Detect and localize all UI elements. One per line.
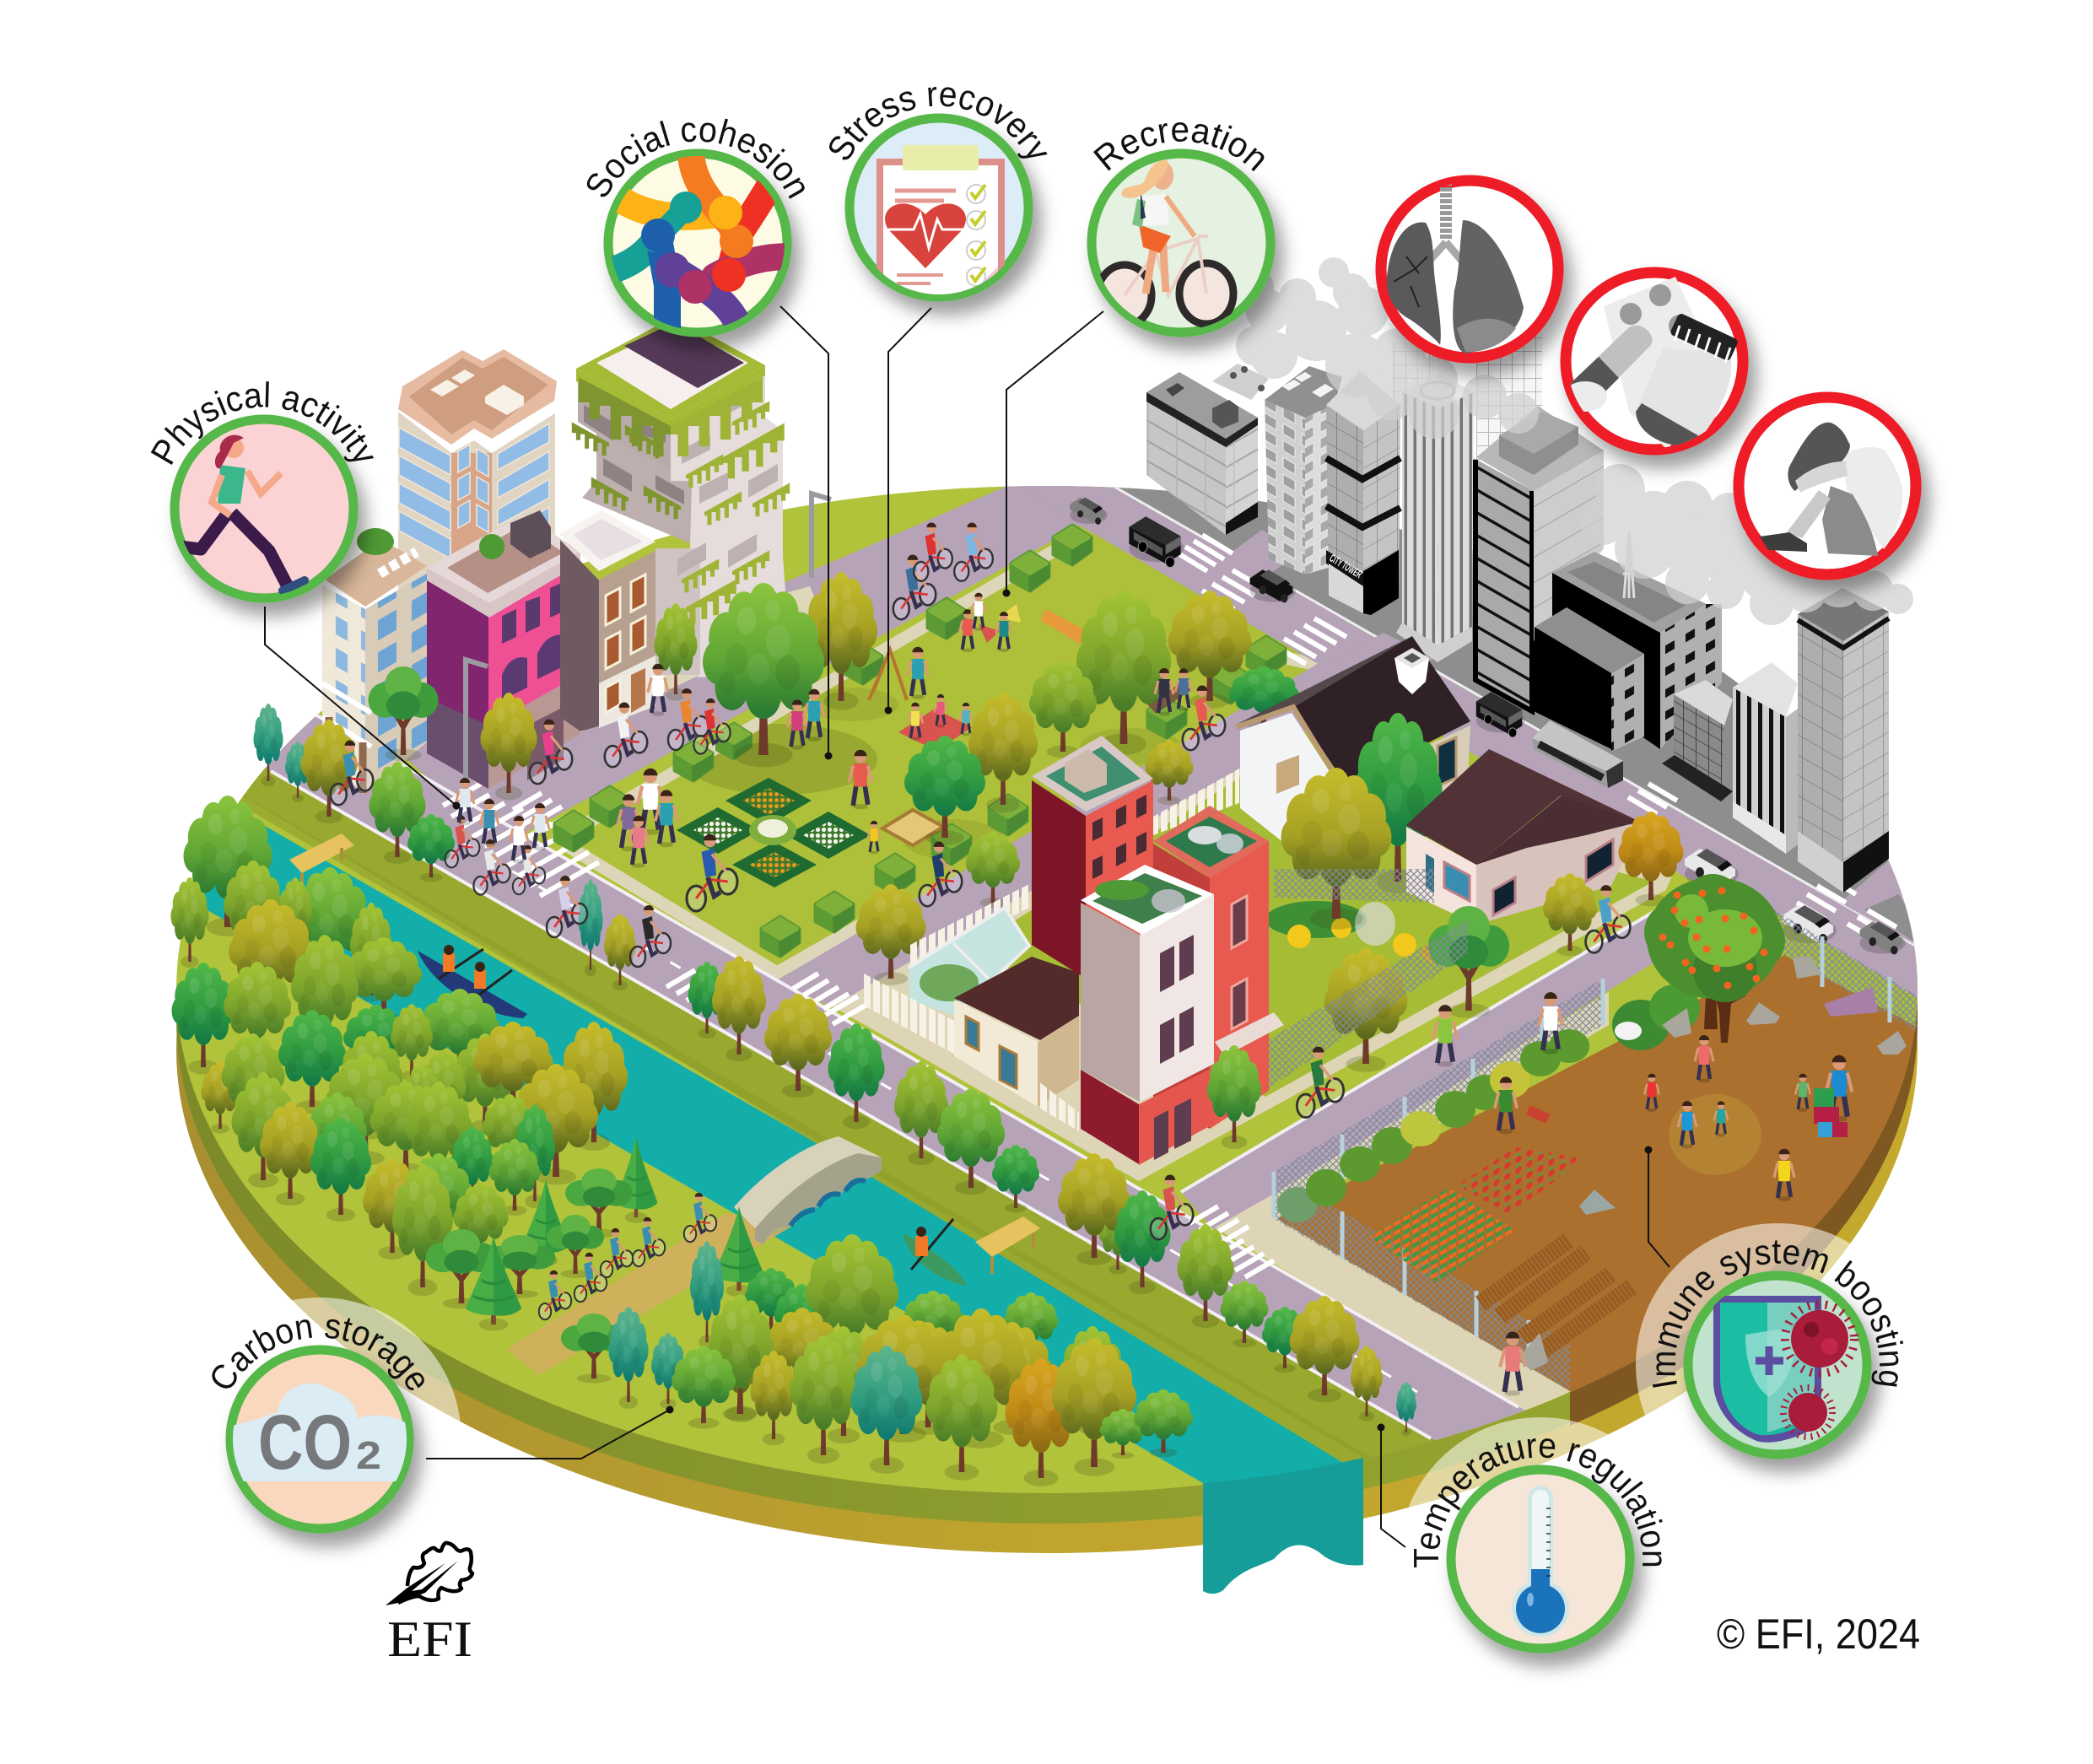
city vehicles: [1070, 498, 1906, 954]
clasped hands: [612, 156, 785, 328]
circle captions on curved paths: [150, 87, 1903, 1567]
building: moss covered apartment tower: [572, 316, 790, 677]
garden flowers and trees in residential block: [1265, 768, 1438, 962]
bus: [1532, 720, 1623, 788]
garden hedge row: [1277, 1029, 1589, 1222]
caption: Immune system boosting: Immune system boosting: [1652, 1240, 1903, 1388]
grey block: [1146, 372, 1258, 535]
street trees along road A and sidewalks: [253, 704, 1416, 1436]
City Tower: CITY TOWER: [1327, 552, 1364, 580]
red brick mid building: [1153, 806, 1284, 1129]
park trees: [368, 572, 1299, 985]
park hedges: [555, 526, 1285, 956]
person hugging knees: [1760, 423, 1903, 556]
CO2 label: CO: [258, 1400, 352, 1486]
runner figure: [180, 435, 305, 591]
woman cycling: [1098, 160, 1233, 326]
cloud: [227, 1384, 413, 1481]
caption: Recreation: Recreation: [1093, 122, 1264, 172]
forest path: [507, 1213, 797, 1375]
icon: recreation circle: [1092, 154, 1270, 332]
icon: immune system circle: [1636, 1223, 1919, 1507]
building: peach and blue tower: [398, 349, 557, 650]
residential street trees: [1207, 812, 1684, 1149]
sidewalk beside road C: [451, 586, 823, 783]
chain link fences: [1269, 869, 1917, 1391]
bridge: [734, 1136, 882, 1244]
side streets: [1232, 530, 1282, 572]
icon: social cohesion circle: [603, 154, 790, 332]
lungs: [1387, 181, 1524, 353]
CO2 label: 2: [356, 1433, 381, 1477]
building: cream apartments: [322, 539, 427, 793]
icon: depressed person circle: [1739, 397, 1916, 575]
front black block: [1534, 607, 1644, 752]
building: magenta townhouse: [427, 510, 580, 789]
icon: medication circle: [1563, 272, 1743, 450]
road H beside the garden: [1181, 916, 1653, 1230]
forest trees behind the kayaks: [170, 796, 392, 1020]
lime wedge behind fence: [1775, 912, 1918, 1026]
river: [203, 826, 1365, 1483]
sidewalk by the garden: [1215, 992, 1609, 1417]
waterfall: river spilling over platform edge: [1203, 1458, 1363, 1594]
rooftop bush on the cream building: [357, 528, 394, 555]
thermometer: [1512, 1486, 1569, 1637]
building: brown townhouse: [559, 510, 655, 731]
park features: flower bed: [677, 778, 871, 887]
tower with rooftop units: [1265, 366, 1342, 575]
park paths: [564, 536, 1324, 973]
caption: Temperature regulation: Temperature regulation: [1414, 1438, 1663, 1567]
pills and bottle: [1563, 277, 1739, 450]
small cream house: [954, 957, 1079, 1131]
front white building with green roof: [1081, 865, 1214, 1165]
copyright: © EFI, 2024: [1717, 1610, 1920, 1658]
street people and cyclists: [331, 522, 1630, 1396]
road B: [779, 663, 1321, 1007]
black striped tower: [1474, 406, 1604, 711]
orange tree with rocks: [1612, 874, 1907, 1055]
icon: damaged lungs circle: [1381, 181, 1558, 358]
icon: physical activity circle: [175, 419, 353, 598]
leader lines with end dots: [265, 306, 1670, 1547]
caption: Social cohesion: Social cohesion: [587, 118, 805, 199]
park details: benches, picnic blanket, sandbox, swing, kites: [869, 604, 1191, 845]
river bank strip: [243, 768, 1435, 1463]
docks: [289, 833, 1040, 1274]
white farmhouse: [1236, 636, 1470, 844]
caption: Stress recovery: Stress recovery: [829, 87, 1048, 160]
greenhouse and picket fence: [862, 769, 1239, 1054]
kayaks on the river: [418, 945, 967, 1286]
forest trees: [172, 935, 1193, 1486]
small grid block: [1662, 680, 1733, 801]
city buildings: [1146, 333, 1889, 893]
large black block: [1552, 532, 1722, 749]
ground: roads, river, lawns and garden: [176, 486, 1918, 1493]
icon: stress recovery circle: [850, 118, 1028, 310]
main road A: [265, 715, 1525, 1441]
city pavement: [1115, 488, 1914, 945]
road C along the buildings: [396, 481, 1122, 844]
platform: disc base and side walls: [176, 516, 1918, 1553]
caption: Carbon storage: Carbon storage: [212, 1318, 424, 1390]
icon: carbon storage circle: [178, 1297, 461, 1581]
pale background towers: [1212, 333, 1542, 460]
caption: Physical activity: Physical activity: [150, 381, 375, 465]
vegetable beds: [1368, 1147, 1632, 1350]
residential block: [831, 751, 1675, 1181]
red brick tall building: [1032, 736, 1153, 979]
icon: oak leaf: [386, 1543, 472, 1605]
crosswalks: [443, 535, 1896, 1277]
garden people and toy blocks: [1495, 1022, 1852, 1371]
road D to the city: [1004, 472, 1940, 1025]
garden soil: [1277, 955, 1915, 1392]
forest cyclists: [539, 1193, 716, 1319]
EFI logo: [386, 1543, 472, 1667]
smoke: [1236, 257, 1913, 625]
shield and viruses: [1713, 1296, 1854, 1443]
tall glass tower: [1798, 588, 1889, 893]
pink house: [1406, 749, 1640, 925]
City Tower: [1326, 371, 1400, 615]
striped white tower: [1396, 374, 1474, 662]
white block with black stripes: [1733, 662, 1798, 854]
EFI wordmark: EFI: [387, 1611, 472, 1667]
street lamps: [466, 494, 831, 789]
green tree behind the pink house: [1353, 713, 1443, 893]
clipboard with heart: [877, 145, 1005, 310]
icon: temperature regulation circle: [1399, 1417, 1682, 1701]
